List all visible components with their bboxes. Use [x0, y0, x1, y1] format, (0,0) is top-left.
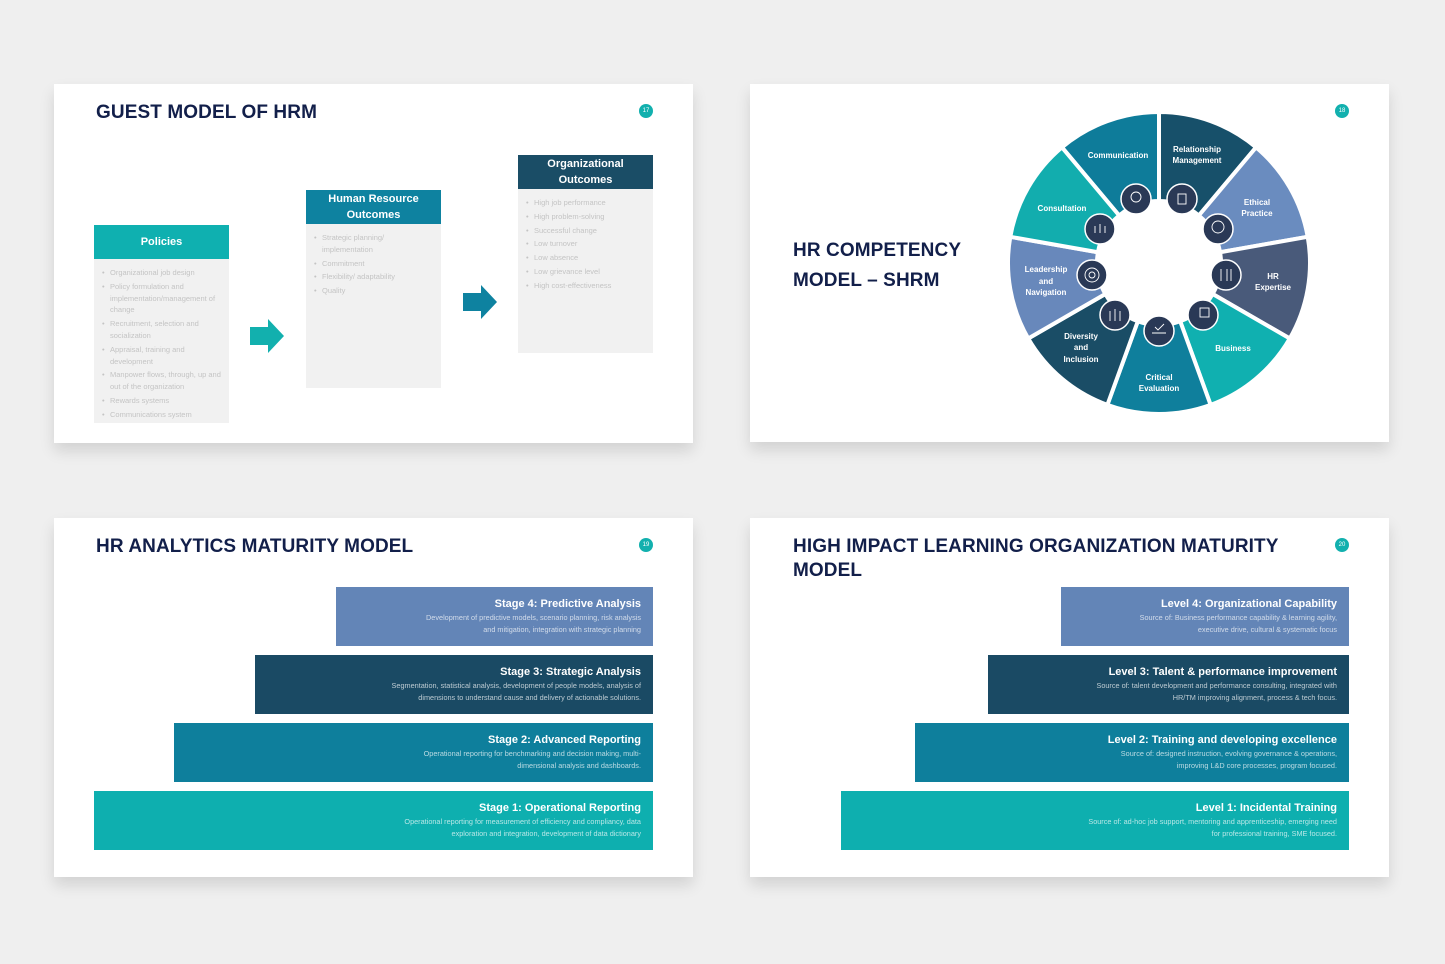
segment labels: Leadership — [1025, 265, 1067, 274]
page number: 17 — [643, 108, 649, 114]
segment labels: and — [1074, 343, 1088, 352]
segment labels: Evaluation — [1139, 384, 1179, 393]
column: HR outcomes: Flexibility/ adaptability — [322, 272, 395, 281]
level 1: for professional training, SME focused. — [1212, 828, 1337, 838]
segment labels: Business — [1215, 344, 1251, 353]
segment labels: Ethical — [1244, 198, 1270, 207]
level 3: Level 3: Talent & performance improvement — [1109, 666, 1337, 678]
stage 1: Operational reporting for measurement of efficiency and compliancy, data — [404, 817, 641, 826]
panel: high impact learning organization — [750, 518, 1389, 877]
column: policies: Recruitment, selection and socialization — [110, 319, 199, 340]
column: organizational outcomes: High job performance — [534, 198, 606, 207]
stage 2: dimensional analysis and dashboards. — [517, 760, 641, 770]
stage 4: Stage 4: Predictive Analysis — [495, 598, 641, 610]
column: policies: Policies — [141, 236, 182, 248]
column: policies: Policy formulation and implementation/management of change — [110, 282, 215, 314]
stage 2: Operational reporting for benchmarking and decision making, multi- — [424, 749, 641, 758]
stage 1 — [94, 791, 653, 850]
segment labels: Consultation — [1038, 204, 1087, 213]
segment labels: Practice — [1241, 209, 1273, 218]
level 3 — [988, 655, 1349, 714]
page number — [1335, 104, 1349, 118]
icons — [1077, 184, 1241, 346]
title: HIGH IMPACT LEARNING ORGANIZATION MATURITY — [793, 536, 1278, 557]
level 4: Level 4: Organizational Capability — [1161, 598, 1337, 610]
stage 4: Development of predictive models, scenario planning, risk analysis — [426, 613, 641, 622]
segment labels: Critical — [1145, 373, 1173, 382]
level 4: Source of: Business performance capability & learning agility, — [1140, 613, 1337, 622]
stage 1: exploration and integration, development of data dictionary — [452, 828, 641, 838]
stage 3 — [255, 655, 653, 714]
stage 3: Segmentation, statistical analysis, development of people models, analysis of — [392, 681, 641, 690]
segment labels — [1025, 145, 1292, 393]
column: policies: Manpower flows, through, up and out of the organization — [110, 370, 221, 391]
title: MODEL — [793, 560, 862, 581]
column: HR outcomes: Quality — [322, 286, 345, 295]
column: organizational outcomes: Low turnover — [534, 239, 577, 248]
segment labels: HR — [1267, 272, 1279, 281]
level 2 — [915, 723, 1349, 782]
column: organizational outcomes: High problem-solving — [534, 212, 604, 221]
level 2: Source of: designed instruction, evolving governance & operations, — [1121, 749, 1337, 758]
column: policies — [94, 225, 229, 423]
stage 1: Stage 1: Operational Reporting — [479, 802, 641, 814]
level 3: HR/TM improving alignment, process & tech focus. — [1173, 692, 1337, 702]
title — [793, 536, 1278, 581]
column: policies: Rewards systems — [110, 396, 169, 405]
stage 4 — [336, 587, 653, 646]
arrow 2 — [463, 285, 497, 319]
segment labels: Diversity — [1064, 332, 1098, 341]
column: organizational outcomes: Outcomes — [559, 174, 612, 186]
segment labels: Expertise — [1255, 283, 1292, 292]
level 4: executive drive, cultural & systematic focus — [1198, 624, 1337, 634]
arrow 1 — [250, 319, 284, 353]
title: MODEL – SHRM — [793, 270, 940, 291]
column: organizational outcomes — [518, 155, 653, 353]
panel: HR competency model — [750, 84, 1389, 442]
stage 3: Stage 3: Strategic Analysis — [500, 666, 641, 678]
level 3: Source of: talent development and performance consulting, integrated with — [1096, 681, 1337, 690]
stage 3: dimensions to understand cause and delivery of actionable solutions. — [418, 692, 641, 702]
column: organizational outcomes: Low grievance level — [534, 267, 600, 276]
column: organizational outcomes: Low absence — [534, 253, 578, 262]
column: HR outcomes: Human Resource — [328, 193, 419, 205]
column: HR outcomes — [306, 190, 441, 388]
level 1: Level 1: Incidental Training — [1196, 802, 1337, 814]
segment labels: and — [1039, 277, 1053, 286]
page number: 19 — [643, 542, 649, 548]
panel: HR analytics maturity model — [54, 518, 693, 877]
column: organizational outcomes: High cost-effectiveness — [534, 281, 611, 290]
title: HR ANALYTICS MATURITY MODEL — [96, 536, 413, 557]
level 2: improving L&D core processes, program focused. — [1177, 760, 1337, 770]
level 1: Source of: ad-hoc job support, mentoring and apprenticeship, emerging need — [1088, 817, 1337, 826]
column: policies: Appraisal, training and development — [110, 345, 185, 366]
stage 2 — [174, 723, 653, 782]
column: HR outcomes: Outcomes — [347, 209, 400, 221]
segment labels: Relationship — [1173, 145, 1221, 154]
column: organizational outcomes: Organizational — [547, 158, 624, 170]
level 4 — [1061, 587, 1349, 646]
column: policies: Organizational job design — [110, 268, 195, 277]
page number — [639, 104, 653, 118]
page number — [1335, 538, 1349, 552]
title: GUEST MODEL OF HRM — [96, 102, 317, 123]
stage 2: Stage 2: Advanced Reporting — [488, 734, 641, 746]
title — [793, 240, 961, 291]
column: HR outcomes: Commitment — [322, 259, 365, 268]
level 1 — [841, 791, 1349, 850]
title: HR COMPETENCY — [793, 240, 961, 261]
segment labels: Inclusion — [1063, 355, 1099, 364]
panel: guest model of HRM — [54, 84, 693, 443]
level 2: Level 2: Training and developing excellence — [1108, 734, 1337, 746]
segment labels: Communication — [1088, 151, 1148, 160]
page number — [639, 538, 653, 552]
column: HR outcomes: Strategic planning/ implementation — [322, 233, 384, 254]
column: policies: Communications system — [110, 410, 192, 419]
page number: 18 — [1339, 108, 1345, 114]
segment labels: Management — [1173, 156, 1222, 165]
page number: 20 — [1339, 542, 1345, 548]
wheel chart — [1010, 114, 1308, 412]
segment labels: Navigation — [1026, 288, 1067, 297]
column: organizational outcomes: Successful change — [534, 226, 597, 235]
stage 4: and mitigation, integration with strategic planning — [483, 624, 641, 634]
